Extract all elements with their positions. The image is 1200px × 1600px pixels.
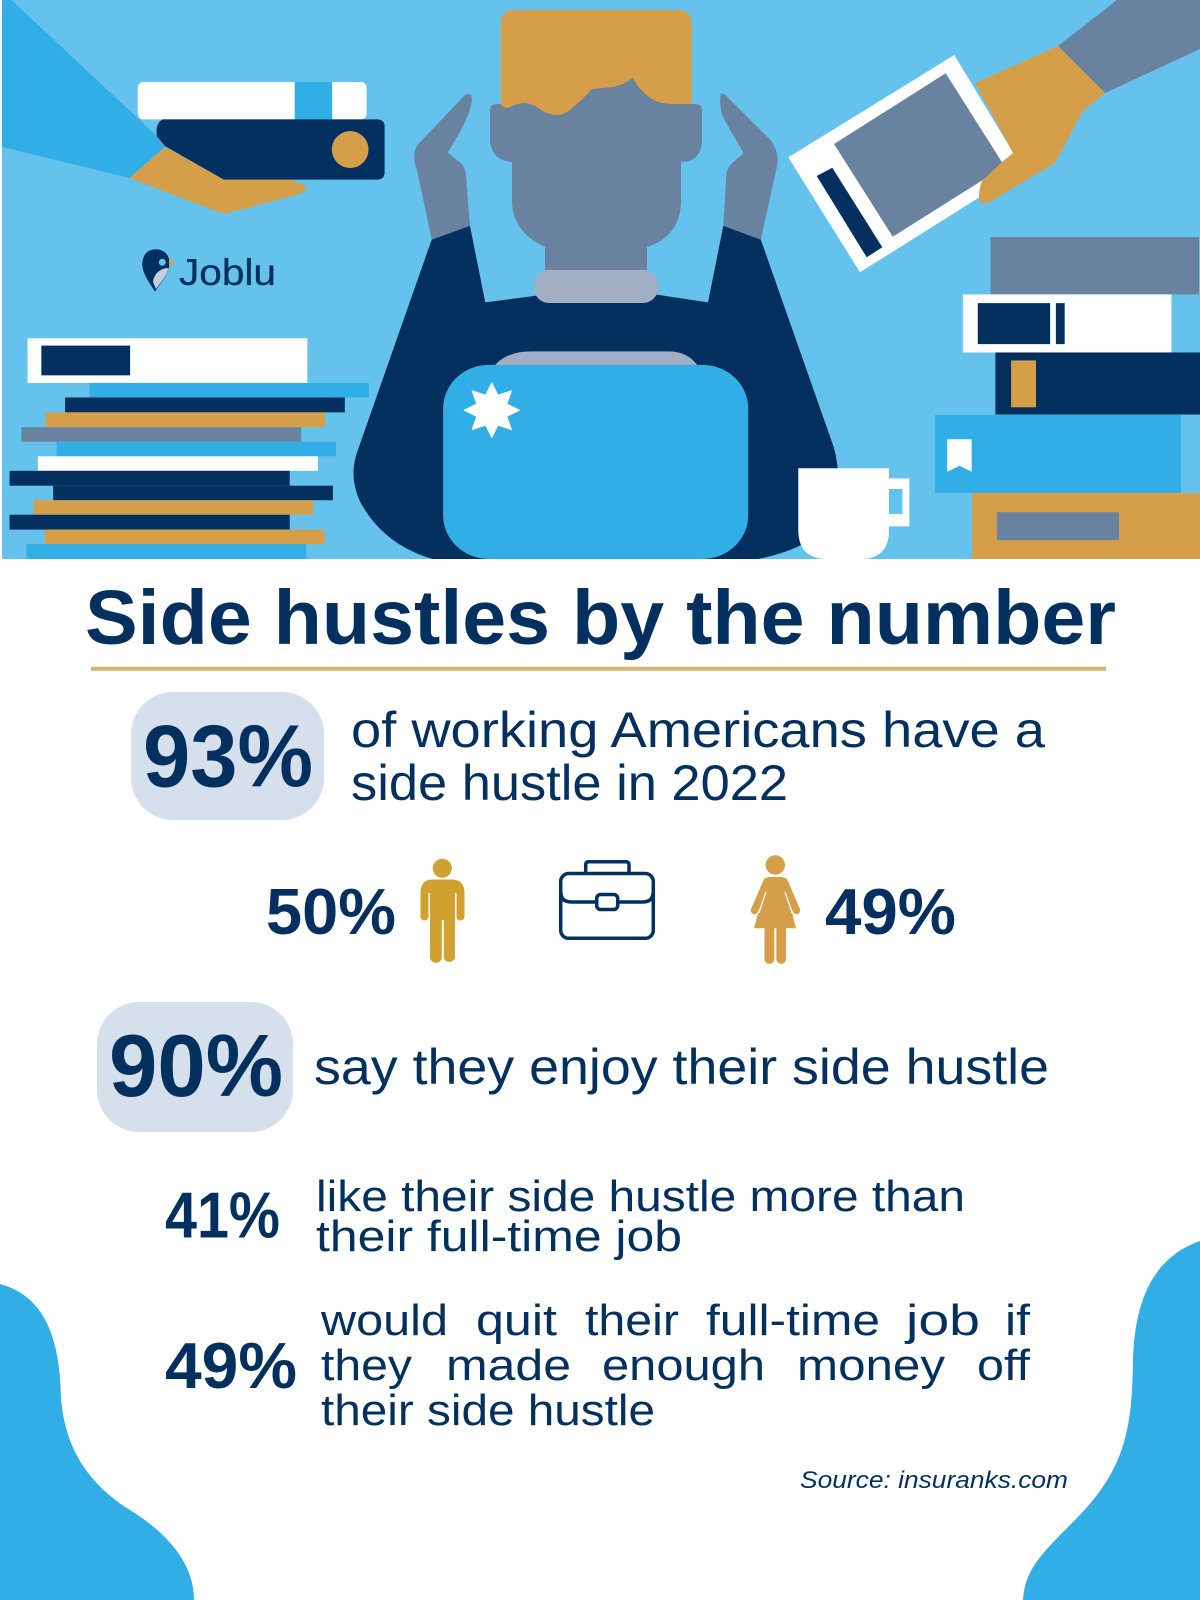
stat: 41%: 41% [165,1178,280,1252]
stat: 49% would quit: would [320,1296,448,1345]
background blob: bottom right [1023,1241,1200,1600]
coffee mug [798,468,909,559]
stat: 49% would quit: enough [602,1341,765,1390]
tablet [788,55,1013,272]
stat: 49% would quit: their [585,1296,679,1345]
stat: 49% would quit: they [321,1341,412,1390]
title: Side hustles by the number [85,575,1116,661]
stat: 49% would quit: their side hustle [321,1386,655,1435]
books held in hand [138,82,385,180]
left book stack [10,338,369,559]
left arm holding books [2,0,306,214]
stat: 49% would quit: quit [476,1296,557,1345]
laptop [443,351,748,559]
stat: 49% would quit: if [1005,1296,1031,1345]
stat: 49% would quit [165,1296,1031,1435]
source note: Source: insuranks.com [800,1467,1068,1494]
stat: 49% would quit: money [797,1341,945,1390]
background blob: bottom left [0,1284,194,1600]
stat: 90%: say they enjoy their side hustle [314,1039,1049,1095]
right arm sleeve [1058,0,1200,93]
stat: 49% would quit: job [903,1296,980,1345]
stat: 41% [165,1172,965,1261]
stat: 49% would quit: made [446,1341,571,1390]
person head, hair and collar [490,10,702,303]
stat: 41%: like their side hustle more than [316,1172,965,1221]
stat: 41%: their full-time job [316,1212,682,1261]
icon: woman [754,855,796,964]
banner illustration [2,0,1200,559]
person body and raised hands [353,93,839,559]
stat: 50% men: 50% [266,875,396,948]
icon: briefcase [561,862,653,938]
stat: 93%: side hustle in 2022 [351,755,788,811]
stat: 93%: of working Americans have a [351,702,1045,758]
stat: 90%: 90% [109,1016,283,1115]
stat: 93% [131,692,1045,820]
right book stack [935,237,1200,559]
stat: 49% would quit: off [977,1341,1031,1390]
stat: 93%: 93% [143,706,313,806]
icon: man [420,859,464,963]
stat: 49% women: 49% [825,875,956,948]
stat: 90% [97,1002,1049,1132]
hand holding tablet [975,46,1105,203]
stat: 49% would quit: 49% [165,1329,297,1402]
logo wordmark: Joblu [179,252,276,293]
stat: 49% would quit: full-time [706,1296,880,1345]
logo icon: penguin [142,249,175,292]
